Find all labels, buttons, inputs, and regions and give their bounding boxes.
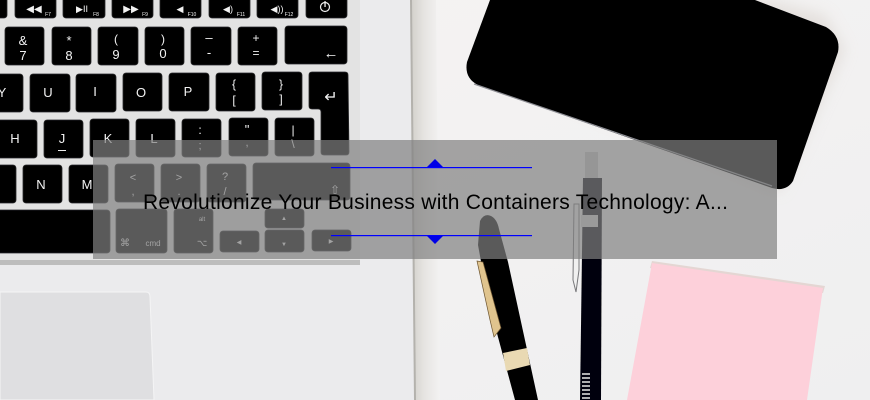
title banner overlay (93, 140, 777, 259)
key labels: ( (114, 32, 118, 46)
bottom ornament line (331, 235, 532, 244)
key labels: ⇧ (330, 183, 340, 197)
key labels: cmd (145, 239, 161, 248)
key labels: ▲ (281, 216, 287, 222)
key labels: M (82, 177, 92, 192)
black ballpoint pen (573, 152, 602, 400)
key labels: 8 (65, 48, 73, 63)
key labels: " (245, 122, 250, 137)
key labels: O (136, 85, 146, 100)
key labels: N (36, 177, 46, 192)
key labels: { (232, 77, 236, 91)
top ornament line (331, 159, 532, 168)
key labels: ▶ (329, 239, 334, 245)
key labels: ⌘ (120, 238, 130, 249)
key labels: L (150, 131, 158, 146)
key labels: * (66, 33, 72, 48)
key labels: + (252, 31, 260, 45)
key labels: , (245, 137, 249, 149)
key labels: = (252, 46, 260, 60)
phone shadow (480, 0, 845, 192)
key labels: ▼ (281, 242, 287, 248)
key labels: ⌥ (197, 238, 207, 248)
phone (466, 0, 838, 189)
key labels: ← (324, 45, 338, 62)
trackpad (0, 292, 154, 400)
key labels (0, 1, 340, 249)
pink sticky note (627, 263, 823, 400)
key labels: ? (222, 171, 228, 183)
key labels: ◀)) (271, 4, 283, 14)
key labels: alt (199, 217, 205, 223)
key labels: / (223, 186, 227, 198)
title: Revolutionize Your Business with Containers Technology: A... (143, 191, 728, 214)
key labels: F9 (142, 12, 148, 18)
laptop shadow edge (411, 0, 440, 400)
key labels: & (19, 33, 28, 48)
key labels: F7 (45, 12, 51, 18)
key labels: ) (161, 32, 165, 46)
key labels: – (205, 30, 213, 45)
key labels: ◀◀ (26, 4, 42, 15)
key labels: | (291, 123, 295, 137)
key labels: - (207, 45, 211, 60)
key labels: ↵ (324, 89, 338, 106)
key labels: U (43, 85, 53, 100)
pink note shadow (650, 261, 825, 293)
key labels: F8 (93, 12, 99, 18)
key labels: . (177, 186, 181, 198)
phone edge highlight (474, 84, 772, 186)
key labels: I (93, 84, 97, 99)
key labels: 9 (112, 47, 120, 62)
key labels: < (130, 172, 136, 184)
key labels: ; (198, 140, 202, 152)
key labels: ◀) (223, 4, 233, 14)
key labels: ◀ (237, 240, 242, 246)
key labels: \ (291, 137, 295, 151)
key labels: K (104, 131, 113, 146)
key labels: F12 (285, 12, 294, 18)
pen ribbed grip (582, 374, 590, 398)
key labels: [ (232, 93, 236, 107)
key labels: , (131, 186, 135, 198)
laptop body (0, 0, 416, 400)
key labels: > (176, 172, 182, 184)
key labels: J (59, 131, 65, 146)
key labels: ] (279, 92, 283, 106)
key labels: ▶▶ (123, 4, 139, 15)
key labels: 0 (159, 46, 167, 61)
black fountain pen (477, 215, 538, 400)
key labels: ▶II (76, 4, 88, 14)
key labels: ◀ (177, 4, 184, 14)
pen gold clip (477, 261, 501, 337)
keyboard keys (0, 0, 351, 253)
pen silver clip (573, 204, 579, 292)
key labels: H (10, 131, 20, 146)
key labels: F10 (188, 12, 197, 18)
key labels: } (279, 77, 283, 91)
key labels: 7 (19, 48, 27, 63)
key labels: P (184, 84, 192, 99)
key labels: : (198, 123, 202, 137)
key labels: F11 (237, 12, 245, 18)
pen gold ring (503, 348, 530, 371)
